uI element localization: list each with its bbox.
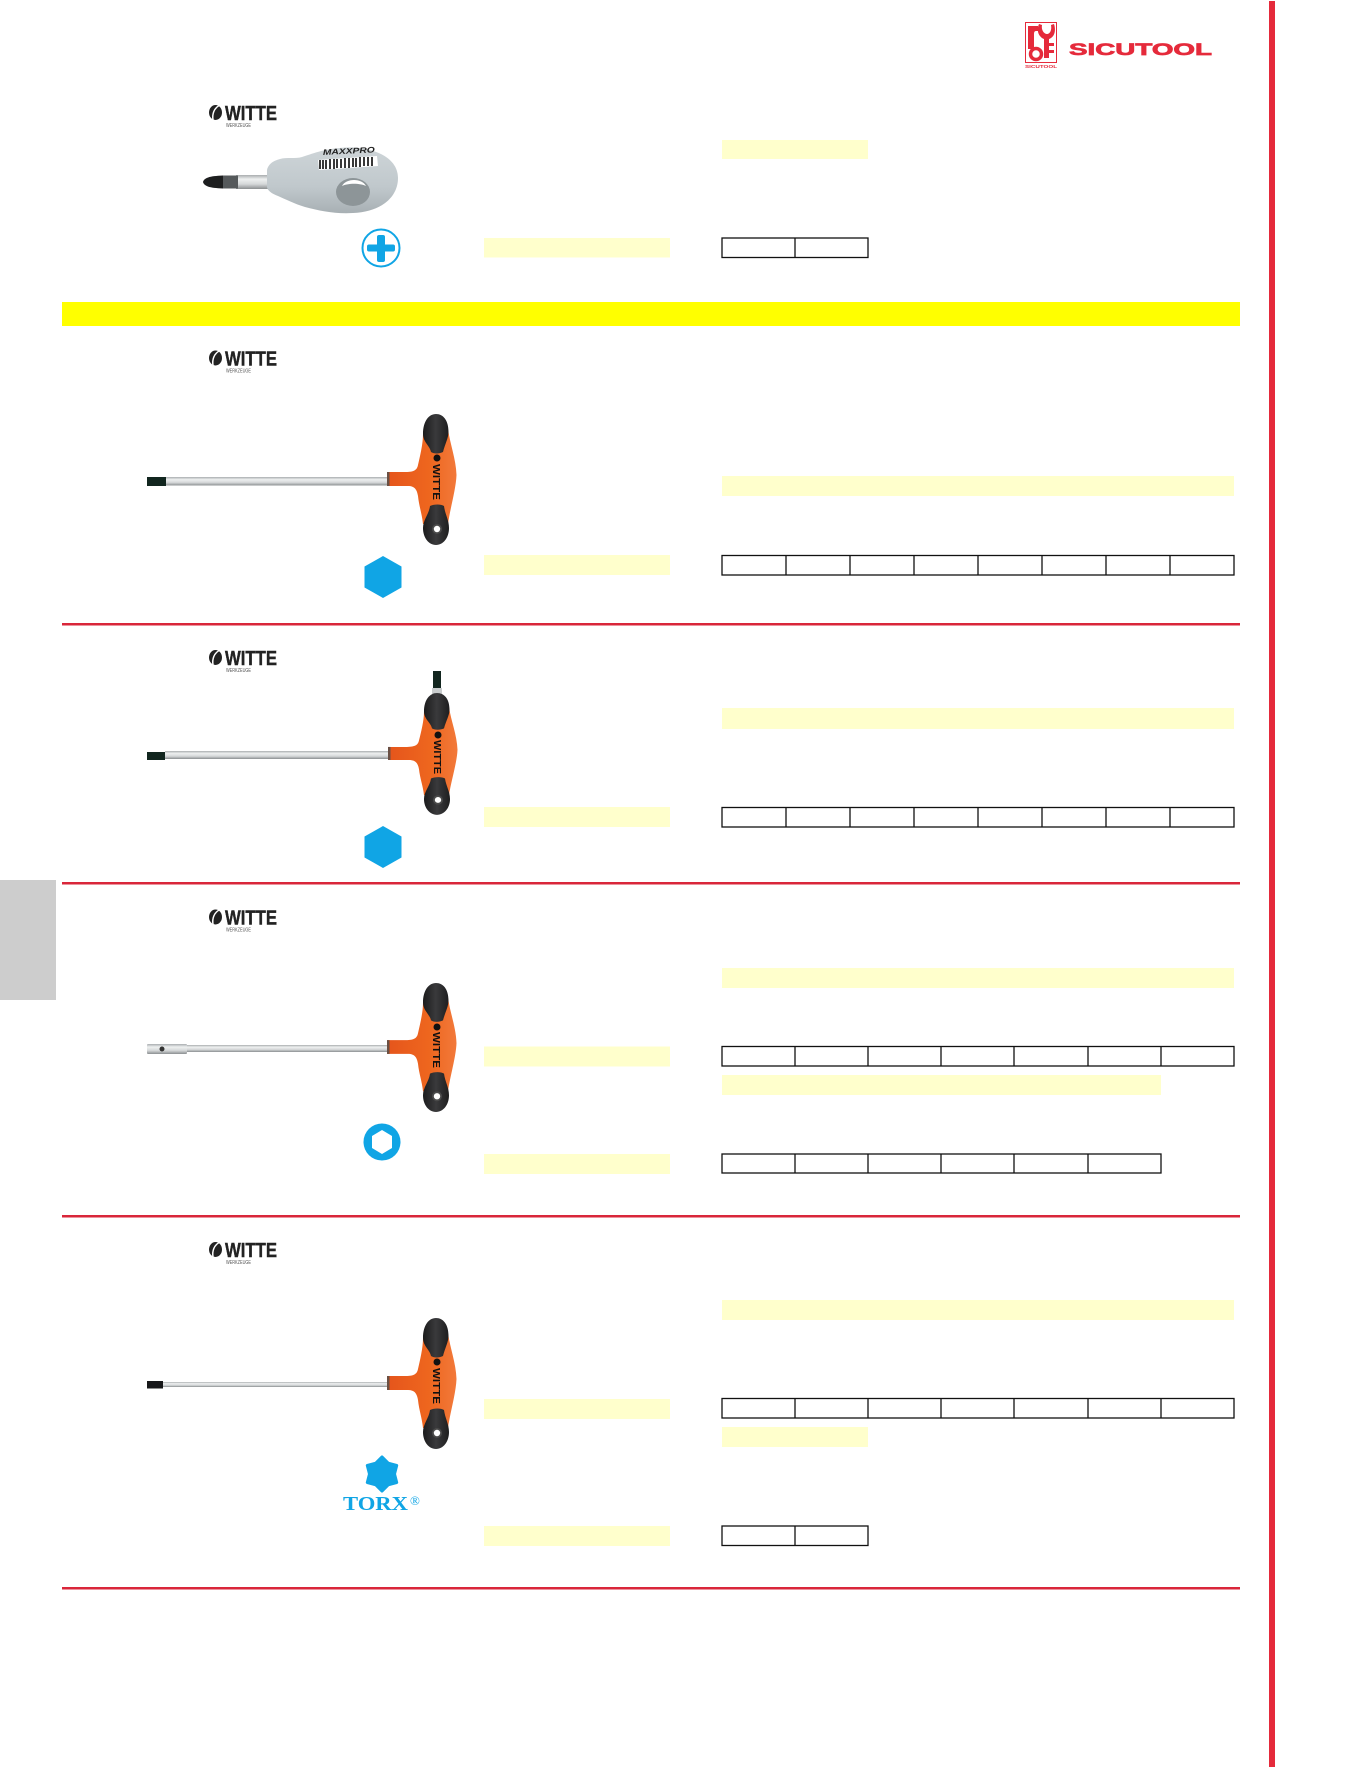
witte logo	[209, 348, 277, 374]
torx wordmark: ®	[410, 1493, 420, 1508]
t-handle tool	[147, 983, 456, 1112]
highlight bar: heading	[722, 140, 868, 159]
witte logo: WERKZEUGE	[226, 123, 251, 129]
yellow section band	[62, 302, 1240, 326]
sicutool logo: SICUTOOL	[1025, 64, 1057, 69]
highlight bar: label 2	[484, 1526, 670, 1546]
witte logo: WERKZEUGE	[226, 928, 251, 934]
icon: hexagon	[364, 556, 402, 598]
table: 7 cells	[722, 1046, 1234, 1066]
witte logo: WERKZEUGE	[226, 368, 251, 374]
red divider 4	[62, 1587, 1240, 1590]
screwdriver photo	[203, 145, 398, 213]
highlight bar: heading 2	[722, 1427, 868, 1447]
section 4: t-handle socket driver	[147, 908, 1234, 1174]
highlight bar: heading 2	[722, 1075, 1161, 1095]
witte logo	[209, 908, 277, 934]
witte logo: WITTE	[225, 908, 277, 930]
table: 7 cells	[722, 1398, 1234, 1418]
witte logo	[209, 103, 277, 129]
sicutool logo: SICUTOOL	[1069, 40, 1212, 59]
t-handle tool	[147, 414, 456, 545]
icon: hexagon	[364, 826, 402, 868]
highlight bar: heading	[722, 968, 1234, 988]
witte logo: WITTE	[225, 1240, 277, 1262]
t-handle tool: WITTE	[430, 1032, 442, 1068]
witte logo: WITTE	[225, 348, 277, 370]
witte logo	[209, 1240, 277, 1266]
icon: phillips	[362, 230, 400, 266]
highlight bar: heading	[722, 708, 1234, 729]
witte logo: WERKZEUGE	[226, 1260, 251, 1266]
torx wordmark: TORX	[343, 1493, 409, 1515]
t-handle tool: WITTE	[430, 464, 442, 500]
witte logo	[209, 648, 277, 674]
witte logo: WITTE	[225, 103, 277, 125]
t-handle tool	[147, 1318, 456, 1449]
red divider 3	[62, 1215, 1240, 1218]
t-handle tool	[147, 671, 458, 815]
highlight bar: label	[484, 1399, 670, 1419]
icon: hex socket	[364, 1124, 400, 1160]
sicutool logo	[1025, 22, 1212, 69]
table: 6 cells	[722, 1154, 1161, 1173]
grey chapter tab	[0, 880, 56, 1000]
highlight bar: heading	[722, 476, 1234, 496]
highlight bar: label	[484, 807, 670, 827]
section 2: t-handle hex key	[147, 348, 1234, 598]
table: 2 cells	[722, 1526, 868, 1546]
witte logo: WITTE	[225, 648, 277, 670]
right red margin bar	[1269, 1, 1275, 1767]
table: 2 cells	[722, 238, 868, 258]
screwdriver photo: MAXXPRO	[323, 145, 376, 157]
witte logo: WERKZEUGE	[226, 668, 251, 674]
red divider 1	[62, 623, 1240, 626]
red divider 2	[62, 882, 1240, 884]
highlight bar: heading	[722, 1300, 1234, 1320]
section 1: stubby screwdriver	[203, 103, 868, 266]
t-handle tool: WITTE	[431, 740, 443, 774]
table: 8 cells	[722, 808, 1234, 827]
icon: torx star	[367, 1457, 397, 1491]
t-handle tool: WITTE	[430, 1368, 442, 1404]
section 3: t-handle hex key with side drive	[147, 648, 1234, 868]
highlight bar: label 2	[484, 1154, 670, 1174]
highlight bar: label	[484, 238, 670, 258]
table: 8 cells	[722, 556, 1234, 575]
highlight bar: label	[484, 1046, 670, 1066]
highlight bar: label	[484, 555, 670, 575]
section 5: t-handle torx driver	[147, 1240, 1234, 1546]
